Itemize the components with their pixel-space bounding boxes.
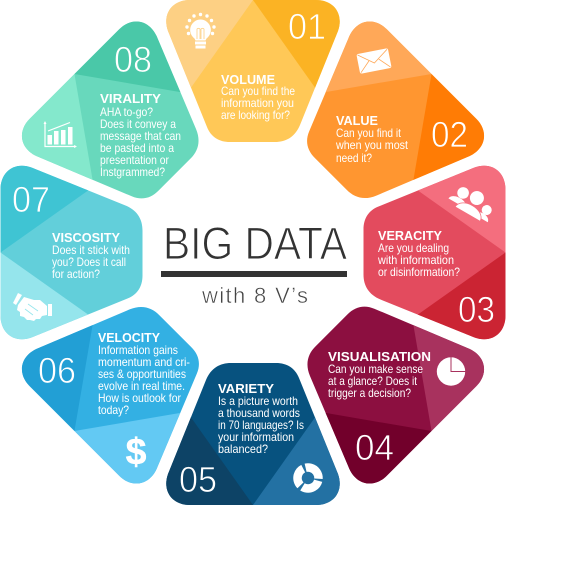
text: value: when you most (335, 138, 409, 152)
text: variety: VARIETY (218, 381, 274, 396)
text: veracity: VERACITY (378, 228, 442, 243)
panel: 05 variety (166, 363, 340, 505)
text: visualisation: VISUALISATION (328, 349, 431, 364)
panel: 06 velocity (22, 307, 199, 484)
panel: 07 viscosity (0, 166, 142, 340)
panel: 04 visualisation (307, 306, 484, 484)
text: virality: message that can (100, 129, 181, 143)
text: value (335, 113, 409, 165)
number 05: 05 (179, 459, 217, 500)
text: veracity: or disinformation? (378, 265, 460, 279)
icon: growth chart (44, 121, 77, 148)
text: value: Can you find it (336, 126, 402, 140)
text: volume: Can you find the (221, 84, 295, 98)
text: virality: be pasted into a (100, 141, 174, 155)
text: value: VALUE (336, 113, 378, 128)
text: velocity: today? (98, 403, 129, 417)
icon: pie chart (437, 357, 466, 386)
number 01: 01 (288, 6, 326, 47)
text: velocity: momentum and cri- (98, 355, 190, 369)
text: viscosity: for action? (52, 267, 100, 281)
text: variety: in 70 languages? Is (218, 418, 304, 432)
panel: 01 volume (166, 0, 340, 142)
text: variety (218, 381, 304, 456)
text: veracity: with information (377, 253, 454, 267)
text: velocity: ses & opportunities (98, 367, 186, 381)
text: virality: Instgrammed? (100, 165, 165, 179)
title (161, 218, 347, 308)
icon: envelope (356, 48, 392, 74)
text: variety: your information (218, 430, 294, 444)
text: volume: are looking for? (221, 108, 290, 122)
text: virality: AHA to-go? (100, 105, 153, 119)
icon: people (446, 180, 499, 225)
text: viscosity: Does it stick with (52, 243, 130, 257)
number 03: 03 (458, 289, 495, 330)
icon: refresh circle (295, 465, 321, 491)
text: virality: VIRALITY (100, 91, 161, 106)
text: veracity: Are you dealing (378, 241, 449, 255)
panel: 02 value (307, 22, 484, 198)
text: visualisation: Can you make sense (328, 362, 423, 376)
text: virality: Does it convey a (100, 117, 176, 131)
text: velocity: evolve in real time. (98, 379, 185, 393)
number 08: 08 (114, 39, 152, 80)
text: variety: Is a picture worth (218, 394, 298, 408)
text: velocity: VELOCITY (98, 330, 160, 345)
text: viscosity: VISCOSITY (52, 230, 120, 245)
text: viscosity (52, 230, 130, 281)
title: BIG DATA (163, 218, 347, 269)
text: veracity (377, 228, 460, 279)
text: viscosity: you? Does it call (52, 255, 126, 269)
icon: light bulb (185, 13, 216, 49)
number 07: 07 (12, 179, 50, 220)
text: volume: information you (221, 96, 294, 110)
text: velocity (98, 330, 190, 417)
subtitle: with 8 V’s (201, 283, 308, 308)
icon: handshake (13, 293, 52, 321)
number 06: 06 (38, 350, 76, 391)
text: velocity: How is outlook for (98, 391, 181, 405)
text: virality: presentation or (100, 153, 169, 167)
panel: 03 veracity (364, 166, 506, 340)
text: value: need it? (336, 151, 372, 165)
text: virality (100, 91, 181, 179)
text: variety: balanced? (218, 442, 268, 456)
text: volume: VOLUME (221, 72, 275, 87)
panel: 08 virality (22, 22, 198, 198)
text: velocity: Information gains (98, 343, 178, 357)
text: volume (221, 72, 295, 122)
text: variety: a thousand words (218, 406, 300, 420)
text: visualisation: trigger a decision? (328, 386, 411, 400)
icon: dollar sign: $ (126, 431, 147, 472)
text: visualisation (328, 349, 431, 400)
number 02: 02 (431, 114, 468, 155)
number 04: 04 (355, 427, 394, 468)
text: visualisation: at a glance? Does it (328, 374, 418, 388)
